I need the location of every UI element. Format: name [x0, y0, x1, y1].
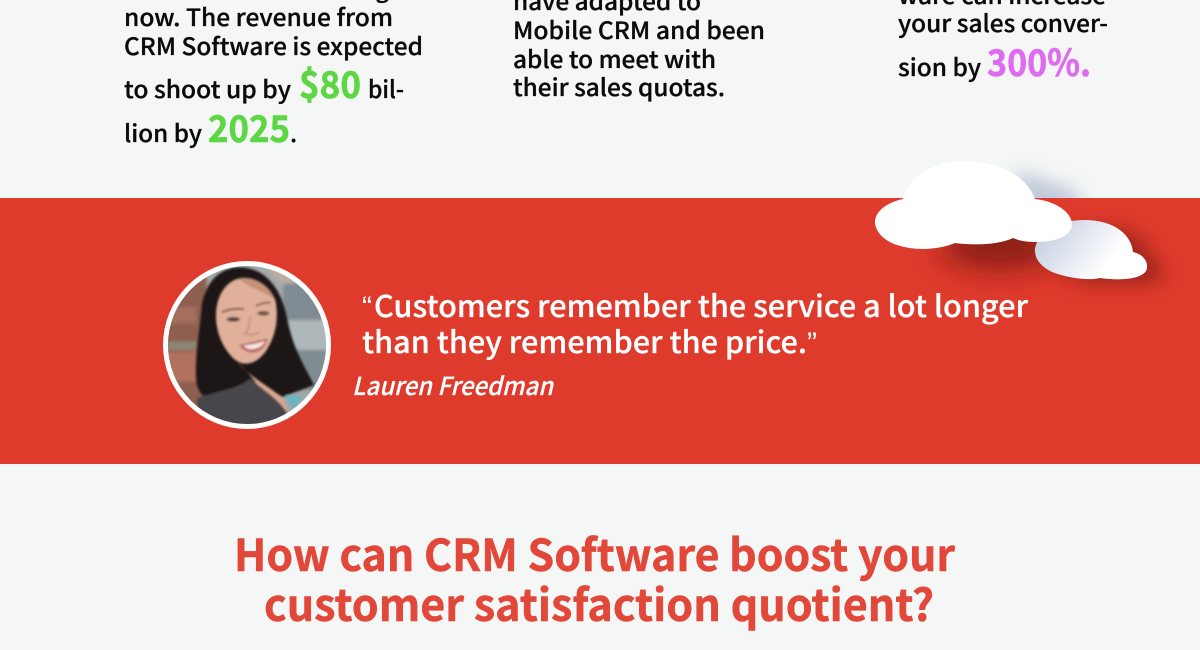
text block: mobile CRM sales quotas: able to meet with	[513, 40, 716, 75]
mouth	[239, 338, 268, 353]
text block: mobile CRM sales quotas: their sales quotas.	[513, 68, 725, 103]
quote text: than they remember the price.	[362, 318, 807, 362]
text block: CRM revenue forecast: to shoot up by	[124, 70, 291, 105]
text block: CRM revenue forecast: CRM Software is expected	[124, 27, 423, 62]
quote attribution: Lauren Freedman	[352, 367, 554, 403]
text block: CRM revenue forecast: 2025	[208, 99, 290, 153]
jacket	[197, 378, 287, 430]
quote text: “	[362, 291, 372, 324]
portrait photo	[168, 266, 326, 424]
text block: sales conversion: your sales conver-	[898, 4, 1108, 39]
text block: CRM revenue forecast: .	[290, 114, 297, 149]
small cloud	[1035, 220, 1147, 279]
portrait: Lauren Freedman	[157, 260, 337, 433]
text block: CRM revenue forecast: bil-	[368, 70, 404, 105]
portrait ring	[163, 261, 331, 429]
text block: mobile CRM sales quotas	[513, 0, 765, 103]
quote text: Customers remember the service a lot longer	[374, 282, 1029, 326]
hair	[196, 267, 314, 405]
eyes	[227, 317, 240, 322]
panel: red quote band	[0, 198, 1200, 464]
text block: mobile CRM sales quotas: Mobile CRM and been	[513, 11, 765, 46]
text block: CRM revenue forecast	[124, 0, 423, 153]
text block: sales conversion: sion by	[898, 48, 981, 83]
face	[216, 278, 277, 364]
teal top	[285, 395, 303, 409]
text block: sales conversion: 300%.	[987, 33, 1091, 87]
quote text: ”	[807, 327, 817, 360]
neck and chest	[237, 362, 288, 412]
text block: CRM revenue forecast: $80	[299, 55, 361, 109]
text block: CRM revenue forecast: lion by	[124, 114, 202, 149]
text block: sales conversion	[898, 0, 1108, 87]
cloud shadow on page background	[1012, 166, 1088, 198]
quote text	[362, 282, 1029, 362]
heading: customer satisfaction quotient?	[264, 570, 934, 634]
heading	[234, 520, 956, 634]
large cloud	[875, 161, 1072, 249]
cloud shadows on band	[940, 224, 1163, 284]
icon: clouds with shadows	[875, 161, 1163, 284]
nose shading	[245, 317, 259, 335]
heading: How can CRM Software boost your	[234, 520, 956, 584]
